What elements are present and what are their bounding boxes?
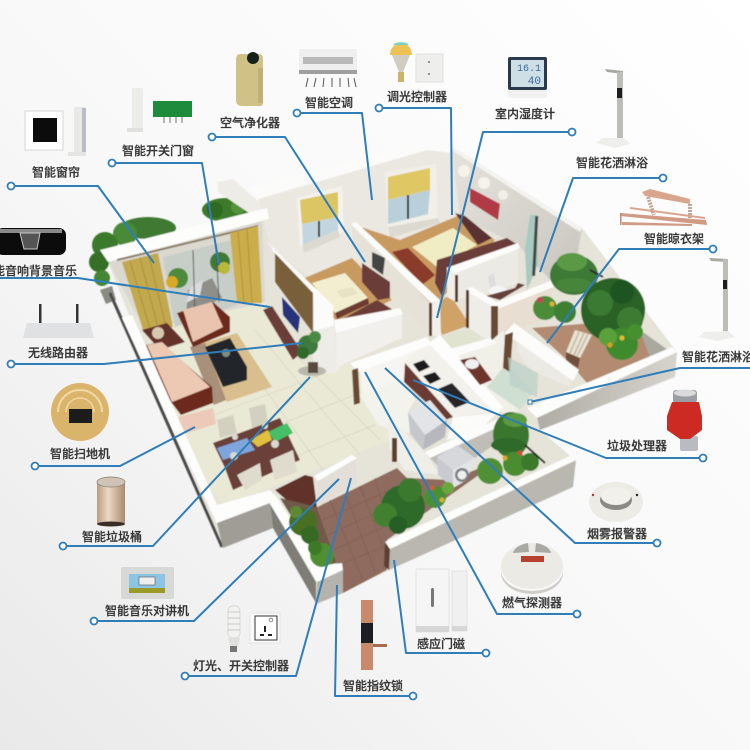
television (282, 297, 300, 333)
label: air conditioner: 智能空调 (305, 95, 353, 110)
icon: speaker (0, 228, 66, 255)
line: air conditioner (294, 110, 372, 200)
label: smoke alarm: 烟雾报警器 (587, 526, 647, 541)
label: intercom: 智能音乐对讲机 (105, 603, 189, 618)
icon: air conditioner (299, 49, 357, 87)
icon: socket (250, 613, 280, 643)
bedroom tv unit (362, 252, 390, 300)
small back balcony wall (218, 179, 268, 215)
icon: smoke alarm (589, 482, 643, 522)
dining chairs back (217, 404, 268, 438)
dining table (213, 418, 300, 490)
cabinet along patio (275, 475, 317, 512)
bedroom 2 rug (392, 248, 435, 285)
label: curtain: 智能窗帘 (32, 164, 80, 180)
icon: air purifier (236, 52, 263, 106)
bathroom back wall (446, 243, 520, 302)
line: humidity meter (437, 128, 576, 318)
left planters (289, 506, 334, 567)
icon: dimmer switch (416, 54, 443, 82)
label: disposer: 垃圾处理器 (607, 438, 667, 453)
main floor (145, 302, 395, 505)
icon: gas detector (501, 543, 563, 594)
armchair (177, 302, 230, 347)
bedroom 1 window (297, 186, 344, 253)
label: robot vacuum: 智能扫地机 (50, 446, 110, 461)
terrace gray corner (640, 330, 668, 358)
back left planters (89, 198, 250, 304)
pink floor (178, 408, 216, 434)
refrigerator block (408, 400, 447, 450)
terrace floor (532, 323, 668, 383)
label: light switch: 灯光、开关控制器 (193, 658, 289, 673)
icon: door sensor (416, 569, 467, 632)
line: shower 1 (540, 174, 666, 272)
line: drying rack (547, 246, 716, 343)
icon: hygrometer: 40 (528, 76, 541, 88)
dining chairs front (237, 450, 297, 490)
icon: router (23, 304, 94, 338)
icon: shower panel 1 (596, 69, 630, 148)
label: humidity meter: 室内湿度计 (495, 106, 555, 121)
icon: hygrometer (508, 57, 547, 98)
icon: smart bulb (390, 42, 412, 82)
bedroom 2 bed (412, 213, 518, 298)
icon: fingerprint lock (361, 600, 387, 670)
bathroom fixtures (486, 215, 538, 300)
front partition wall (334, 308, 403, 372)
bedroom 1 floor (300, 258, 392, 325)
floor plan house (89, 143, 677, 604)
right curtain (230, 226, 262, 303)
side table (142, 323, 185, 350)
label: shower 1: 智能花洒淋浴 (576, 155, 648, 170)
terrace trees (533, 253, 645, 360)
living window view (163, 240, 237, 327)
line: intercom (90, 479, 339, 624)
washing machine (437, 445, 475, 488)
line: gas detector (365, 372, 580, 618)
label: dimmer: 调光控制器 (387, 89, 447, 104)
patio low wall (314, 455, 357, 507)
line: disposer (413, 380, 706, 462)
terrace bench (566, 330, 592, 368)
kitchen plants (477, 412, 545, 484)
line: fingerprint lock (335, 585, 416, 700)
line: air purifier (208, 134, 365, 262)
icon: shower panel 2 (699, 258, 735, 341)
line: trash can (60, 377, 310, 550)
line: smoke alarm (385, 368, 660, 546)
floor tile grid (200, 330, 380, 480)
line: shower 2 (528, 368, 750, 404)
sofa (146, 342, 213, 415)
floor tile lines (322, 478, 400, 578)
brown tile floor (317, 460, 500, 593)
living wall (100, 208, 269, 330)
house base (108, 147, 677, 604)
label: gas detector: 燃气探测器 (502, 595, 562, 610)
rug stripes (190, 343, 226, 405)
icon: trash can (97, 477, 125, 526)
label: window switch: 智能开关门窗 (122, 143, 194, 158)
outer terrace wall (527, 347, 677, 430)
line: curtain (8, 182, 154, 263)
terrace low wall (384, 456, 576, 570)
right back wall (452, 147, 582, 283)
white partition wall living (265, 240, 336, 373)
icon: window switch (127, 88, 192, 132)
line: background music (0, 278, 270, 307)
bedroom 2 window (385, 164, 440, 238)
kitchen counter (404, 355, 470, 420)
tv cabinet (263, 306, 302, 360)
partition between bedrooms (351, 222, 441, 337)
laundry wall (387, 418, 515, 475)
label: air purifier: 空气净化器 (220, 115, 280, 130)
label: router: 无线路由器 (28, 345, 88, 360)
wall art (470, 188, 500, 220)
potted plant (297, 331, 326, 376)
left outer wall (110, 293, 343, 604)
label: fingerprint lock: 智能指纹锁 (343, 678, 403, 693)
shower room (445, 323, 579, 415)
icon: garbage disposer (667, 390, 702, 451)
kitchen walls and floor (350, 335, 503, 440)
bath cabinet (460, 357, 492, 385)
icon: hygrometer: 16.1 (517, 64, 541, 75)
rug (190, 333, 272, 402)
line: dimmer (376, 104, 452, 215)
icon: robot vacuum (51, 383, 109, 441)
icon: curtain switch (25, 107, 86, 156)
label: trash can: 智能垃圾桶 (82, 529, 142, 544)
icon: energy saving bulb (228, 606, 240, 652)
corridor tile (440, 328, 483, 350)
bedroom back wall (248, 143, 460, 278)
callout lines (0, 104, 750, 700)
stone wall (275, 253, 313, 333)
icon: drying rack (620, 189, 707, 226)
bedroom 2 floor (355, 215, 495, 305)
label: drying rack: 智能晾衣架 (644, 231, 704, 246)
coffee table (205, 338, 247, 387)
icon: intercom (121, 567, 174, 599)
left curtain (122, 253, 173, 330)
line: door sensor (394, 560, 490, 656)
bathroom partition (466, 280, 556, 343)
bed 1 headboard (335, 300, 398, 332)
line: light switch (182, 478, 351, 680)
line: robot vacuum (32, 427, 195, 470)
patio plants (373, 478, 454, 534)
bedroom 1 bed (312, 273, 369, 319)
line: router (8, 343, 302, 368)
line: window switch (108, 160, 219, 265)
curtain rod (117, 226, 258, 260)
label: door sensor: 感应门磁 (417, 636, 465, 651)
